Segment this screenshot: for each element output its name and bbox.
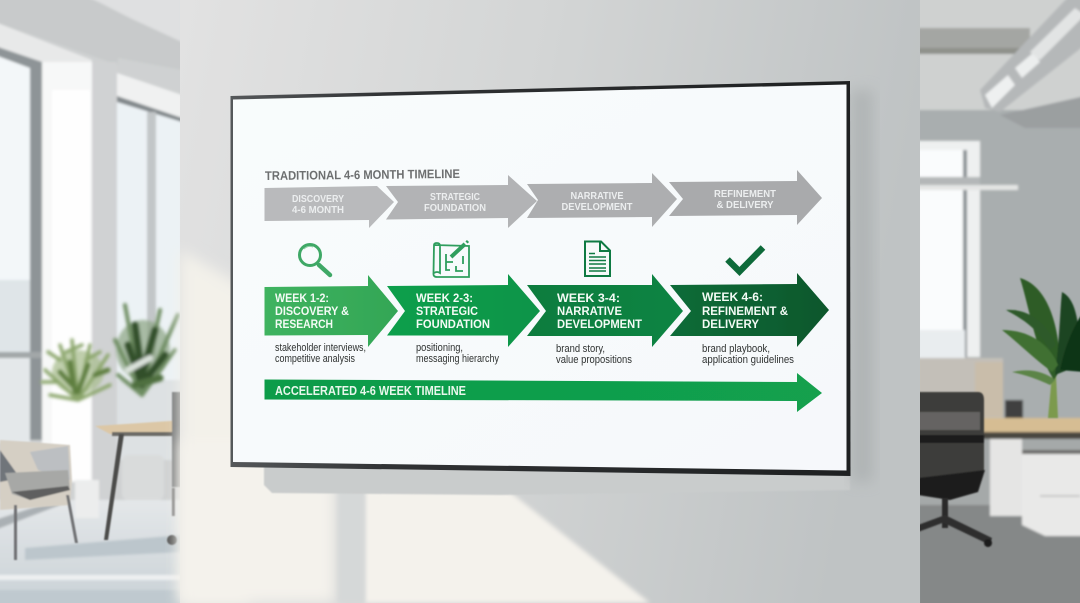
accelerated timeline bar arrow: ACCELERATED 4-6 WEEK TIMELINE — [275, 383, 466, 398]
green arrow: week 1-2: RESEARCH — [275, 317, 333, 331]
green arrow: week 2-3 — [387, 274, 540, 347]
green arrow: week 4-6 — [670, 273, 829, 347]
accelerated timeline bar arrow — [264, 373, 822, 412]
green arrow: week 3-4 — [527, 274, 683, 347]
green arrow: week 3-4: DEVELOPMENT — [557, 317, 643, 331]
deliverables: week 3-4 — [556, 343, 633, 366]
grey arrow: strategic foundation: FOUNDATION — [424, 202, 486, 214]
green arrow: week 2-3: WEEK 2-3: — [416, 291, 473, 305]
table and chair: left — [0, 392, 182, 560]
wall — [180, 0, 920, 603]
screen frame — [230, 81, 850, 476]
green arrow: week 3-4: WEEK 3-4: — [557, 291, 620, 305]
icon: check mark — [728, 248, 763, 272]
deliverables: week 3-4: value propositions — [556, 354, 633, 366]
section title: traditional timeline: TRADITIONAL 4-6 MONTH TIMELINE — [265, 167, 460, 183]
green arrow: week 4-6: WEEK 4-6: — [702, 290, 763, 304]
green arrow: week 4-6: DELIVERY — [702, 317, 759, 331]
icon: magnifying glass — [300, 244, 330, 275]
grey arrow: discovery — [264, 186, 394, 228]
grey arrow: narrative development — [527, 173, 677, 227]
green arrow: week 1-2: DISCOVERY & — [275, 304, 349, 318]
background: left office scene — [0, 0, 182, 603]
green arrow: week 1-2 — [264, 275, 398, 347]
deliverables: week 2-3: messaging hierarchy — [416, 353, 499, 365]
accelerated timeline arrows — [264, 273, 829, 347]
screen surface — [233, 84, 846, 470]
grey arrow: discovery: 4-6 MONTH — [292, 204, 344, 216]
grey arrow: strategic foundation — [386, 175, 537, 228]
grey arrow: narrative development: DEVELOPMENT — [562, 201, 633, 213]
green arrow: week 2-3: STRATEGIC — [416, 304, 478, 318]
deliverables: week 2-3: positioning, — [416, 342, 463, 354]
deliverables: week 1-2: stakeholder interviews, — [275, 342, 366, 354]
grey arrow: narrative development: NARRATIVE — [570, 190, 624, 202]
background: right office scene — [918, 0, 1080, 603]
deliverables: week 4-6 — [702, 343, 795, 366]
grey arrow: discovery: DISCOVERY — [292, 193, 344, 205]
grey arrow: refinement and delivery: & DELIVERY — [716, 199, 774, 211]
green arrow: week 3-4: NARRATIVE — [557, 304, 622, 318]
grey arrow: strategic foundation: STRATEGIC — [430, 191, 480, 203]
deliverables: week 2-3 — [416, 342, 499, 365]
green arrow: week 2-3: FOUNDATION — [416, 317, 490, 331]
wall-mounted screen — [230, 81, 850, 476]
green arrow: week 1-2: WEEK 1-2: — [275, 291, 329, 305]
traditional timeline arrows — [264, 170, 822, 228]
grey arrow: refinement and delivery — [669, 170, 822, 225]
deliverables: week 3-4: brand story, — [556, 343, 605, 355]
deliverables: week 1-2 — [275, 342, 366, 365]
deliverables: week 4-6: application guidelines — [702, 354, 795, 366]
plants: left — [42, 305, 178, 400]
deliverables: week 4-6: brand playbook, — [702, 343, 770, 355]
icon: document — [585, 242, 610, 276]
grey arrow: refinement and delivery: REFINEMENT — [714, 188, 777, 200]
office chair: right — [918, 392, 992, 547]
deliverables: week 1-2: competitive analysis — [275, 353, 355, 365]
icon: blueprint with pencil — [433, 241, 469, 277]
green arrow: week 4-6: REFINEMENT & — [702, 304, 788, 318]
plant: right — [1002, 278, 1080, 418]
